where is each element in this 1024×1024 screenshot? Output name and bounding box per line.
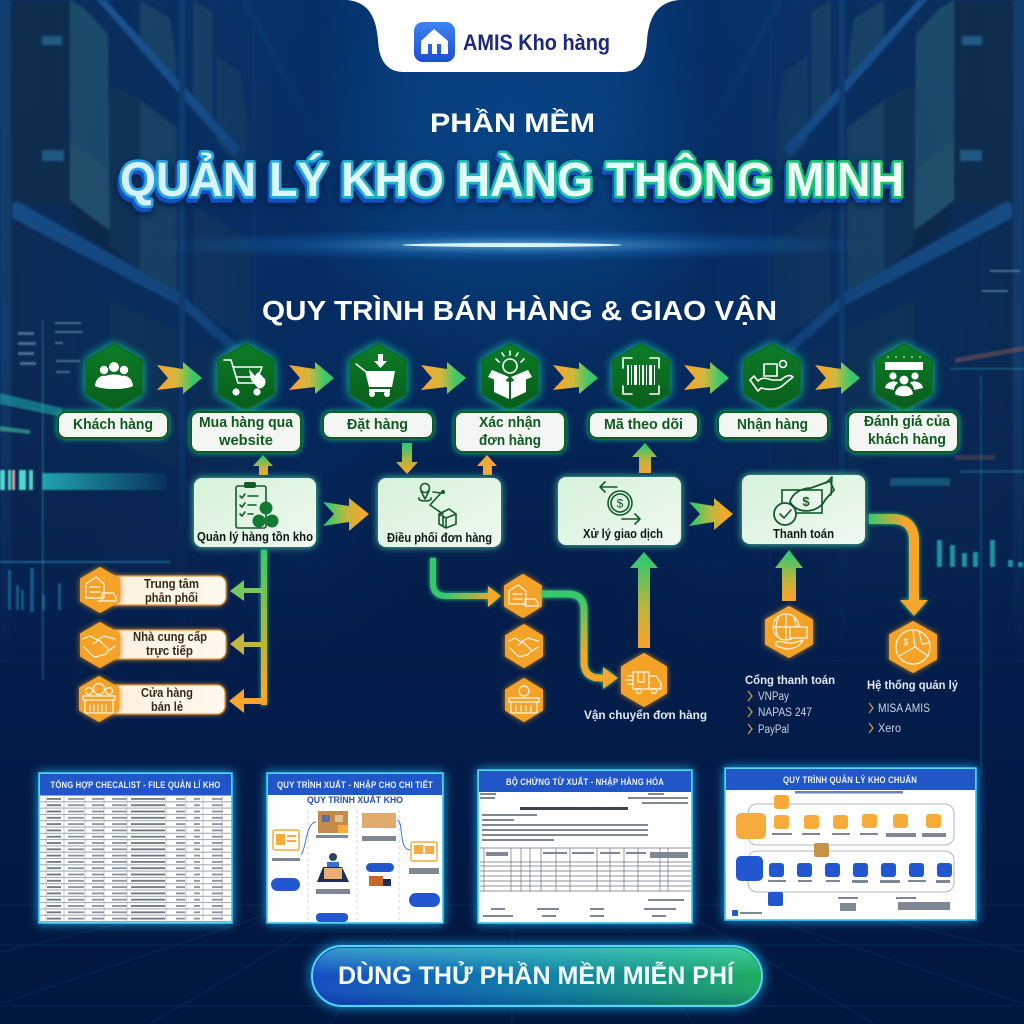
arrow: to coordination bbox=[323, 498, 369, 531]
step: Mua hàng qua website bbox=[191, 344, 301, 452]
card: warehouse documents: BỘ CHỨNG TỪ XUẤT - NHẬP HÀNG HÓA bbox=[506, 776, 664, 788]
icon: hub handshake bbox=[506, 625, 542, 667]
icon: payment gateway bbox=[766, 607, 812, 657]
step: Nhận hàng bbox=[718, 344, 828, 438]
mini form bbox=[480, 793, 691, 917]
node: Vận chuyển đơn hàng: Vận chuyển đơn hàng bbox=[584, 708, 707, 722]
subtitle: PHẦN MỀM bbox=[430, 107, 595, 138]
icon: cash payment: $ bbox=[802, 494, 810, 509]
arrow: up to tracking bbox=[632, 443, 657, 473]
block: Cổng thanh toán: Cổng thanh toán bbox=[745, 673, 835, 687]
card: checklist table bbox=[39, 773, 232, 923]
icon: distribution center bbox=[81, 568, 119, 612]
arrow bbox=[815, 362, 860, 394]
table bbox=[40, 795, 231, 922]
icon: pie chart reports: $ bbox=[903, 637, 909, 647]
icon: add to cart bbox=[350, 344, 406, 410]
arrow: gateway to payment bbox=[775, 550, 803, 601]
step: Mã theo dõi bbox=[589, 344, 698, 438]
step: Khách hàng bbox=[58, 344, 168, 438]
mini process diagram bbox=[732, 791, 954, 916]
icon: receive parcel bbox=[744, 344, 800, 410]
elbow arrow: payment to management system bbox=[869, 519, 928, 616]
arrow bbox=[684, 362, 729, 394]
channel: Trung tâm phân phối: Trung tâm bbox=[144, 577, 199, 591]
main title: QUẢN LÝ KHO HÀNG THÔNG MINH bbox=[120, 152, 904, 207]
channel: Cửa hàng bán lẻ: Cửa hàng bbox=[141, 686, 193, 700]
step: Đặt hàng bbox=[323, 344, 433, 438]
channel: Nhà cung cấp trực tiếp: Nhà cung cấp bbox=[133, 630, 207, 644]
icon: AMIS house logo bbox=[414, 22, 455, 62]
panel: Quản lý hàng tồn kho: Quản lý hàng tồn kho bbox=[197, 530, 313, 544]
channel: Nhà cung cấp trực tiếp bbox=[81, 623, 226, 667]
list: gateways: NAPAS 247 bbox=[758, 707, 812, 719]
step: Xác nhận đơn hàng: đơn hàng bbox=[479, 432, 541, 449]
channel: Trung tâm phân phối bbox=[81, 568, 226, 612]
card: warehouse documents bbox=[478, 770, 692, 923]
panel: Điều phối đơn hàng bbox=[378, 478, 501, 547]
panel: Xử lý giao dịch: Xử lý giao dịch bbox=[583, 527, 663, 541]
panel: Điều phối đơn hàng: Điều phối đơn hàng bbox=[387, 531, 492, 545]
icon: checklist and stock bbox=[236, 482, 278, 528]
icon: shopping cart bbox=[218, 344, 274, 410]
list: systems: MISA AMIS bbox=[878, 703, 930, 715]
elbow arrow: coordination to hub bbox=[433, 558, 501, 607]
step: Mua hàng qua website: website bbox=[218, 432, 273, 449]
arrow: to payment bbox=[689, 498, 733, 530]
mini flow diagram: QUY TRÌNH XUẤT KHO bbox=[307, 795, 403, 806]
elbow arrow: hub to shipping bbox=[542, 594, 618, 689]
card: standard warehouse process: QUY TRÌNH QUẢN LÝ KHO CHUẨN bbox=[783, 774, 917, 786]
arrow: up to website bbox=[253, 455, 273, 475]
block: Hệ thống quản lý bbox=[867, 622, 958, 735]
list: gateways bbox=[748, 691, 812, 736]
card: export and import flow bbox=[267, 773, 443, 923]
step: Đánh giá của khách hàng: khách hàng bbox=[868, 431, 946, 448]
step: Mã theo dõi: Mã theo dõi bbox=[604, 416, 683, 433]
glow divider bbox=[142, 229, 882, 261]
panel: top process row bbox=[58, 344, 958, 452]
icon: route to parcel bbox=[419, 484, 456, 528]
block: Cổng thanh toán bbox=[745, 607, 835, 736]
step: Khách hàng: Khách hàng bbox=[73, 416, 153, 433]
icon: customers bbox=[86, 344, 142, 410]
icon: retail store bbox=[80, 677, 118, 721]
arrow bbox=[289, 362, 334, 394]
mini flow diagram bbox=[271, 795, 440, 922]
list: gateways: PayPal bbox=[758, 724, 789, 736]
channel: Trung tâm phân phối: phân phối bbox=[145, 591, 198, 605]
call to action button: DÙNG THỬ PHẦN MỀM MIỄN PHÍ bbox=[338, 960, 735, 990]
icon: barcode bbox=[613, 344, 669, 410]
logo text: AMIS Kho hàng bbox=[463, 30, 610, 55]
step: Nhận hàng: Nhận hàng bbox=[737, 416, 808, 433]
list: gateways: VNPay bbox=[758, 691, 789, 703]
channel: Cửa hàng bán lẻ bbox=[80, 677, 225, 721]
node: Vận chuyển đơn hàng bbox=[584, 654, 707, 722]
arrow bbox=[421, 362, 466, 394]
tree arrows: inventory to channels bbox=[229, 550, 267, 713]
channel: Cửa hàng bán lẻ: bán lẻ bbox=[151, 700, 183, 714]
card: export and import flow: QUY TRÌNH XUẤT - NHẬP CHO CHI TIẾT bbox=[277, 779, 433, 791]
icon: hub store bbox=[506, 679, 542, 721]
step: Đánh giá của khách hàng: Đánh giá của bbox=[864, 413, 951, 430]
list: systems bbox=[869, 703, 930, 735]
panel: Quản lý hàng tồn kho bbox=[194, 478, 316, 547]
step: Đánh giá của khách hàng bbox=[848, 344, 958, 452]
step: Đặt hàng: Đặt hàng bbox=[347, 416, 408, 433]
step: Xác nhận đơn hàng bbox=[455, 344, 565, 452]
block: Hệ thống quản lý: Hệ thống quản lý bbox=[867, 678, 958, 692]
panel: Thanh toán: Thanh toán bbox=[773, 527, 834, 541]
icon: hub distribution bbox=[505, 575, 541, 617]
channel: Nhà cung cấp trực tiếp: trực tiếp bbox=[146, 644, 193, 658]
logo tab bbox=[347, 0, 679, 72]
card: checklist table: TỔNG HỢP CHECALIST - FILE QUẢN LÍ KHO bbox=[50, 779, 220, 791]
arrow: shipping to transaction bbox=[630, 552, 658, 648]
arrow bbox=[553, 362, 598, 394]
panel: Thanh toán bbox=[742, 475, 865, 544]
icon: delivery truck bbox=[622, 654, 666, 706]
arrow: down to coordination bbox=[396, 443, 418, 474]
icon: open box bbox=[482, 344, 538, 410]
step: Mua hàng qua website: Mua hàng qua bbox=[199, 414, 294, 431]
list: systems: Xero bbox=[878, 723, 901, 735]
arrow bbox=[157, 362, 202, 394]
arrow: up to confirmation bbox=[477, 455, 497, 475]
panel: Xử lý giao dịch bbox=[558, 477, 681, 545]
step: Xác nhận đơn hàng: Xác nhận bbox=[479, 414, 541, 431]
card: standard warehouse process bbox=[725, 768, 976, 920]
icon: handshake bbox=[81, 623, 119, 667]
call to action button bbox=[312, 946, 762, 1006]
icon: customer reviews bbox=[876, 344, 932, 410]
section heading: QUY TRÌNH BÁN HÀNG & GIAO VẬN bbox=[262, 295, 777, 326]
icon: money exchange: $ bbox=[617, 496, 624, 510]
